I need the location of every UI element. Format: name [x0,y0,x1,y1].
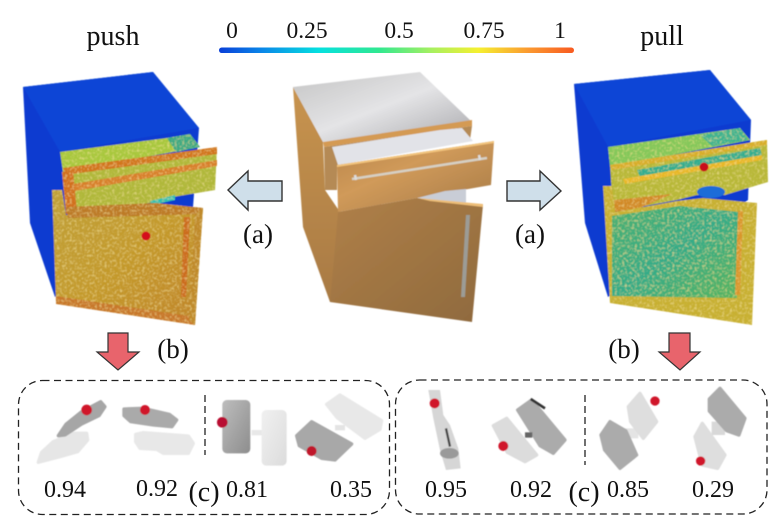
panel: right grasp proposals [396,380,767,514]
scale labels: 0.25 [286,18,328,44]
cabinet body [574,70,751,297]
gripper 0.35 [297,395,382,460]
dashed frame [18,380,390,514]
label (a) right: (a) [515,219,545,249]
drawer [608,128,768,212]
gripper 0.94 [38,402,105,462]
scores: 0.94 [44,477,86,503]
label (b) right: (b) [608,334,640,364]
gripper 0.95 [428,390,461,470]
scores: 0.35 [330,477,372,503]
panel: left grasp proposals [18,380,390,514]
arrow (a) left [228,171,282,210]
label (c): (c) [188,477,220,508]
cabinet body [23,72,199,297]
right point cloud cabinet: pull [574,70,768,325]
scores [44,476,372,503]
arrow (b) left [97,333,139,370]
scale labels: 1 [554,18,566,44]
color scale legend [219,18,574,53]
dashed frame [396,380,767,514]
drawer [60,134,217,214]
title: pull: pull [640,21,684,52]
gap under drawer [417,189,466,203]
door [330,198,483,322]
door [52,190,203,325]
gripper 0.92 [493,399,565,462]
center rendered cabinet [293,72,494,322]
gripper 0.29 [695,388,745,468]
cabinet top [293,72,472,142]
drawer inside [332,128,473,165]
grippers [428,388,745,470]
gripper 0.85 [601,393,660,468]
grippers [38,395,382,466]
scale labels: 0 [226,18,238,44]
drawer handle [352,155,487,180]
scale labels: 0.75 [463,18,505,44]
scores [425,477,734,503]
gradient bar [219,48,574,53]
contact point [700,162,708,172]
arrow (b) right [659,333,700,370]
drawer front [337,141,494,212]
scores: 0.92 [136,476,178,502]
gripper 0.81 [217,400,287,466]
scores: 0.29 [692,477,734,503]
cabinet left side [293,87,340,302]
cabinet opening [324,126,472,190]
scores: 0.81 [226,477,268,503]
scores: 0.85 [607,477,649,503]
label (c): (c) [568,477,600,508]
blue dent [697,186,725,198]
top front edge [323,120,472,147]
contact point [142,232,150,240]
divider [584,395,586,465]
label (b) left: (b) [157,334,189,364]
divider [204,395,206,455]
scale labels [226,18,566,44]
scores: 0.95 [425,477,467,503]
label (a) left: (a) [243,219,273,249]
gripper 0.92 [124,405,193,453]
scale labels: 0.5 [384,18,414,44]
title: push: push [87,21,139,52]
door handle [461,215,470,297]
door [603,186,757,325]
scores: 0.92 [510,477,552,503]
arrow (a) right [507,171,561,210]
left point cloud cabinet: push [23,72,217,325]
